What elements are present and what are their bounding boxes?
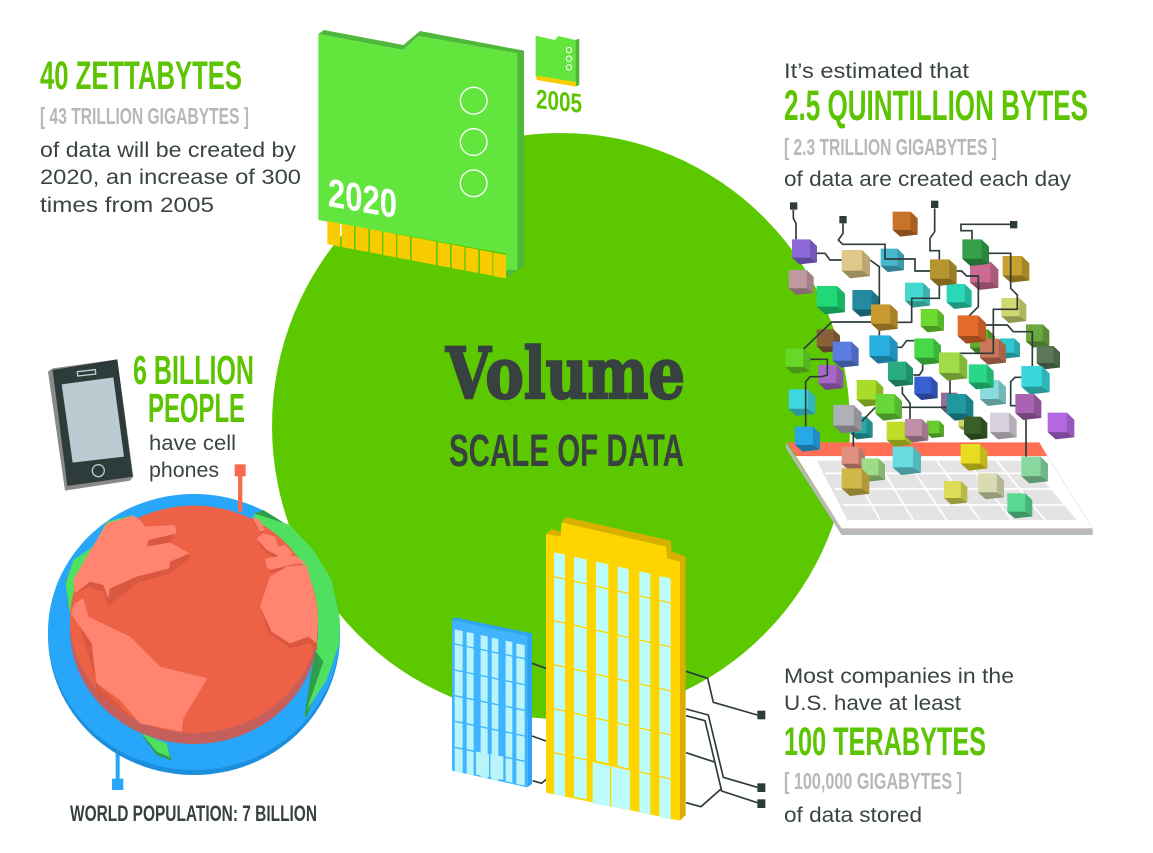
- icon: 2020 memory card: [318, 30, 524, 278]
- coral continents: [71, 516, 318, 732]
- icon: 2005 memory card: [536, 36, 579, 87]
- front cubes: [785, 239, 1074, 518]
- blue marker: world population: [112, 743, 123, 790]
- text block: 2.5 quintillion bytes: of data are created each day: [784, 167, 1071, 191]
- text block: 100 terabytes: of data stored: [784, 803, 922, 827]
- text block: 6 billion people: phones: [149, 458, 219, 482]
- chart: world population globe: [48, 464, 340, 790]
- calendar base: [786, 442, 1093, 535]
- text block: 40 zettabytes: of data will be created by: [40, 138, 296, 162]
- green continents: [66, 510, 340, 761]
- coral disc: [70, 515, 318, 744]
- text block: 6 billion people: [133, 347, 254, 482]
- globe base: [48, 496, 340, 775]
- label: 2005: 2005: [536, 83, 582, 119]
- label: 2020: 2020: [328, 170, 397, 227]
- wire terminals: [757, 711, 765, 808]
- text block: 2.5 quintillion bytes: [784, 59, 1088, 191]
- coral marker: phone owners: [235, 464, 246, 512]
- text block: 100 terabytes: [784, 664, 1014, 827]
- text block: 100 terabytes: 100 TERABYTES: [784, 720, 986, 764]
- text block: 100 terabytes: Most companies in the: [784, 664, 1014, 688]
- text block: 6 billion people: PEOPLE: [148, 385, 245, 431]
- text block: 40 zettabytes: 2020, an increase of 300: [40, 165, 301, 189]
- icon: smartphone: [48, 359, 133, 491]
- building wires: [532, 663, 757, 807]
- text block: 100 terabytes: U.S. have at least: [784, 691, 961, 715]
- chart: data cubes over calendar grid: [785, 201, 1093, 535]
- yellow building: [546, 517, 686, 821]
- text block: 40 zettabytes: [40, 54, 301, 217]
- text block: 40 zettabytes: [ 43 TRILLION GIGABYTES ]: [40, 103, 249, 129]
- text block: 100 terabytes: [ 100,000 GIGABYTES ]: [784, 768, 962, 794]
- text block: 6 billion people: have cell: [149, 431, 236, 455]
- circuit wires: [793, 208, 1032, 468]
- title: Volume: Volume: [445, 332, 685, 415]
- text block: 2.5 quintillion bytes: [ 2.3 TRILLION GIGABYTES ]: [784, 134, 997, 160]
- text block: 40 zettabytes: 40 ZETTABYTES: [40, 54, 242, 98]
- wire terminals: [790, 201, 1017, 228]
- blue building: [452, 617, 532, 787]
- text block: 40 zettabytes: times from 2005: [40, 193, 214, 217]
- label: world population: WORLD POPULATION: 7 BILLION: [70, 801, 317, 826]
- text block: 6 billion people: 6 BILLION: [133, 347, 254, 393]
- subtitle: scale of data: SCALE OF DATA: [449, 425, 684, 476]
- text block: 2.5 quintillion bytes: It’s estimated that: [784, 59, 969, 83]
- main green circle: [272, 133, 850, 719]
- back cubes: [789, 212, 1060, 439]
- icon: office buildings: [452, 517, 765, 821]
